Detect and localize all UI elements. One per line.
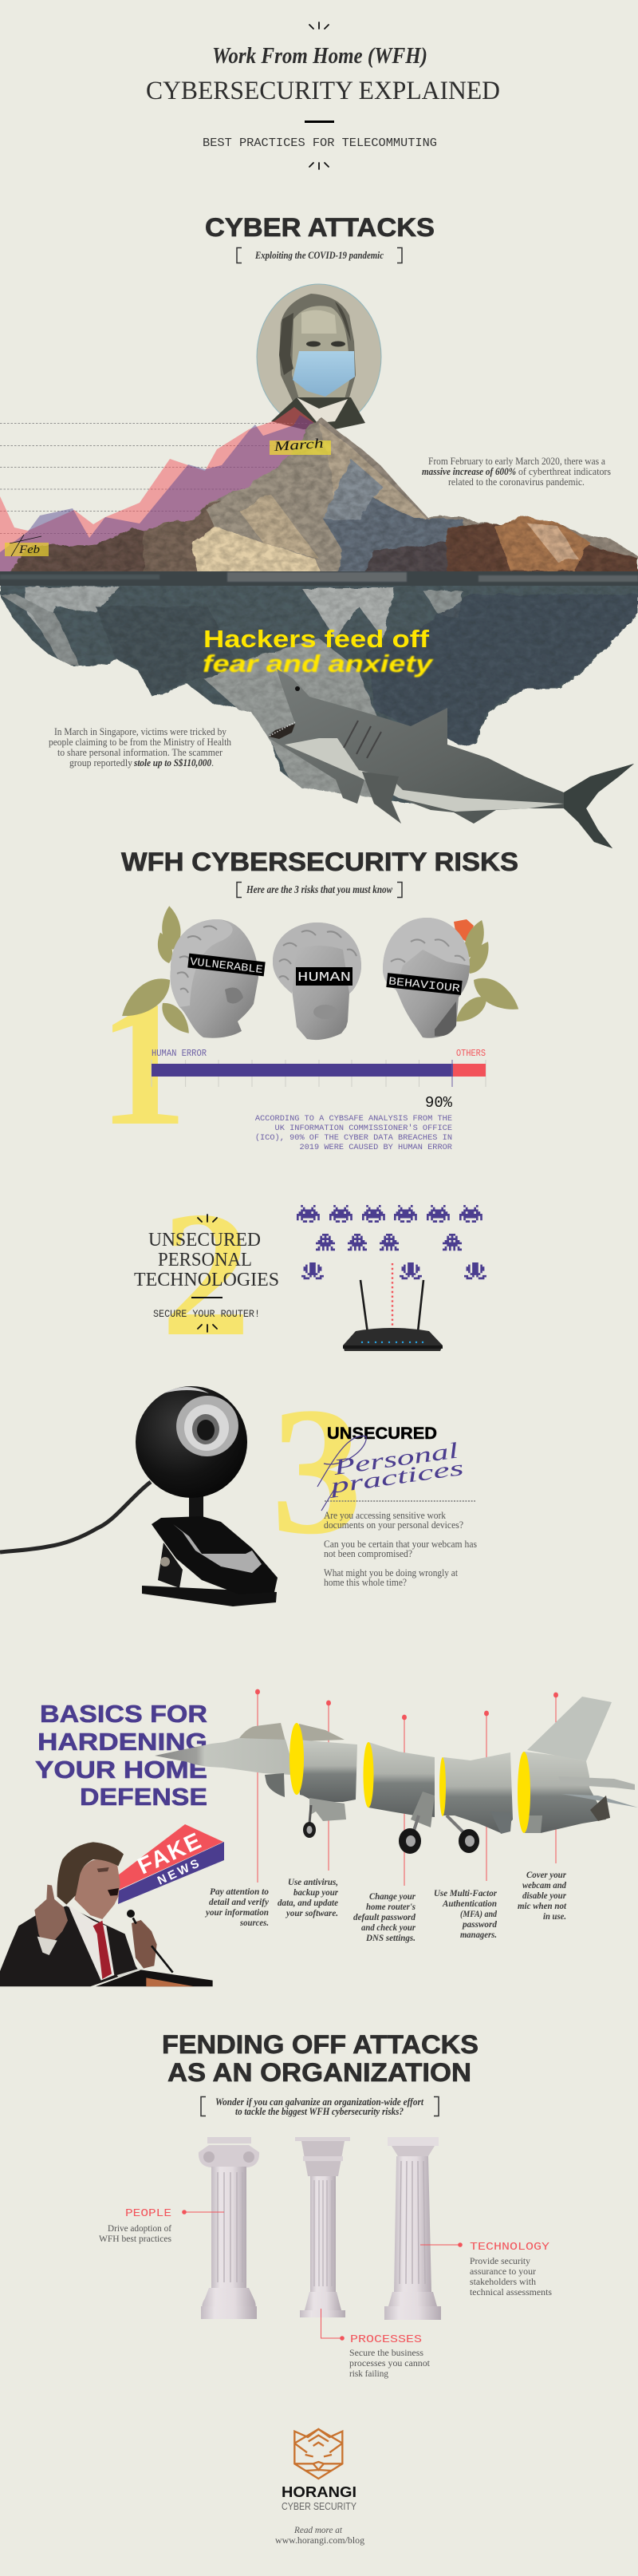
- callout lines: red pointers: [255, 1689, 558, 1886]
- heading: WFH cybersecurity risks: WFH CYBERSECURITY RISKS: [121, 847, 518, 876]
- subtitle: BEST PRACTICES FOR TELECOMMUTING: [203, 136, 437, 150]
- text: tip 2: your software.: [285, 1907, 338, 1918]
- illustration: mountain reflection under water: [0, 586, 638, 804]
- illustration: water surface: [0, 571, 638, 586]
- jet section 4: mid wing: [443, 1752, 513, 1853]
- text: tip 4: [434, 1887, 498, 1940]
- chart: threat indicators area chart: [0, 407, 317, 571]
- illustration: pillar processes: [295, 2137, 350, 2317]
- heading: personal practices script: Personal: [331, 1438, 460, 1480]
- footer: read more: www.horangi.com/blog: [275, 2535, 364, 2546]
- title line 2: CYBERSECURITY EXPLAINED: [146, 77, 500, 105]
- label: March marker: March: [273, 436, 324, 454]
- subheading: galvanize effort: Wonder if you can galvanize an organization-wide effort: [215, 2096, 423, 2108]
- text: questions: [324, 1510, 477, 1588]
- subtitle: SECURE YOUR ROUTER!: [153, 1308, 260, 1320]
- text: tip 1: sources.: [239, 1917, 269, 1928]
- label: March marker: [270, 436, 331, 455]
- text: tip 3: and check your: [361, 1922, 415, 1933]
- heading: basics for hardening your home defense: DEFENSE: [80, 1783, 207, 1811]
- illustration: three statue heads: [115, 905, 525, 1040]
- subheading: galvanize effort: [201, 2096, 439, 2117]
- icon: router: [343, 1280, 443, 1351]
- subheading: galvanize effort: to tackle the biggest WFH cybersecurity risks?: [235, 2106, 404, 2117]
- label: others: OTHERS: [456, 1048, 486, 1059]
- wordmark: HORANGI: [282, 2484, 356, 2500]
- block: unsecured personal technologies: [134, 1215, 279, 1332]
- bar: human error 90%: [152, 1064, 453, 1077]
- text: cybsafe analysis: 2019 WERE CAUSED BY HUMAN ERROR: [299, 1143, 452, 1152]
- text: tip 2: Use antivirus,: [288, 1876, 338, 1887]
- text: questions: Can you be certain that your webcam has: [324, 1539, 477, 1550]
- callout: processes: [321, 2309, 431, 2379]
- subheading: exploiting the pandemic: [237, 247, 402, 263]
- heading lines: UNSECURED: [148, 1230, 261, 1250]
- bar: others 10%: [453, 1064, 486, 1077]
- statue head 1: [170, 919, 266, 1038]
- heading: personal practices script: [317, 1436, 465, 1511]
- footer: read more: [275, 2524, 364, 2546]
- callout: processes: PROCESSES: [350, 2333, 422, 2346]
- text: tip 3: home router's: [366, 1901, 415, 1912]
- text: cybsafe analysis: UK INFORMATION COMMISSIONER'S OFFICE: [275, 1124, 452, 1133]
- header block: [146, 22, 500, 169]
- text: tip 2: data, and update: [278, 1897, 339, 1908]
- subheading: exploiting the pandemic: Exploiting the COVID-19 pandemic: [254, 250, 384, 261]
- text: tip 2: backup your: [293, 1887, 338, 1898]
- callout: hackers feed off fear and anxiety: fear and anxiety: [203, 650, 434, 678]
- statue head 2: [273, 923, 361, 1040]
- graphic: fake news banner: [118, 1824, 224, 1904]
- text: tip 1: [204, 1886, 270, 1928]
- text: Singapore scam note: stole up to S$110,000: [133, 757, 212, 768]
- callout: hackers feed off fear and anxiety: [203, 625, 434, 678]
- footer: read more: Read more at: [293, 2524, 343, 2535]
- illustration: mountain above water: [5, 417, 638, 571]
- portrait: masked banknote figure: [257, 284, 381, 429]
- jet section 1: nose: [155, 1723, 293, 1797]
- number 1: 1: [98, 965, 187, 1163]
- text: Singapore scam note: to share personal information. The scammer: [57, 747, 223, 758]
- text: tip 4: password: [462, 1918, 498, 1930]
- text: Singapore scam note: In March in Singapore, victims were tricked by: [54, 726, 227, 737]
- label: Feb marker: Feb: [18, 543, 41, 556]
- heading: personal practices script: practices: [326, 1456, 465, 1498]
- text: cybsafe analysis: [255, 1114, 452, 1152]
- text: tip 5: webcam and: [522, 1879, 567, 1891]
- heading: basics for hardening your home defense: [35, 1700, 207, 1811]
- graphic: fake news banner: FAKE: [134, 1827, 207, 1879]
- icon: face mask: [293, 351, 355, 397]
- callout: technology: Provide security: [470, 2255, 530, 2266]
- text: tip 5: in use.: [543, 1910, 566, 1922]
- label: vulnerable: VULNERABLE: [189, 956, 263, 977]
- number 2: 2: [161, 1174, 250, 1373]
- text: Singapore scam note: people claiming to be from the Ministry of Health: [49, 737, 232, 748]
- text: tip 5: disable your: [522, 1890, 566, 1901]
- text: Singapore scam note: .: [211, 757, 214, 768]
- text: questions: What might you be doing wrongly at: [324, 1567, 458, 1578]
- heading: basics for hardening your home defense: HARDENING: [37, 1728, 207, 1756]
- illustration: pillar technology: [384, 2137, 441, 2320]
- heading: fending off attacks: AS AN ORGANIZATION: [167, 2058, 471, 2087]
- icon: top sparks: [309, 22, 329, 29]
- icon: sparks bottom: [198, 1325, 217, 1332]
- text: cybsafe analysis: (ICO), 90% OF THE CYBER DATA BREACHES IN: [255, 1133, 452, 1143]
- text: tip 3: default password: [353, 1911, 416, 1922]
- label: human: HUMAN: [297, 970, 351, 986]
- text: 600% increase note: of cyberthreat indicators: [518, 466, 611, 477]
- text: tip 3: [353, 1891, 416, 1943]
- heading: fending off attacks: FENDING OFF ATTACKS: [162, 2030, 478, 2059]
- callout: technology: stakeholders with: [470, 2276, 536, 2287]
- jet section 3: fuselage: [368, 1742, 435, 1854]
- callout: people: WFH best practices: [99, 2233, 171, 2244]
- heading lines: PERSONAL: [158, 1250, 252, 1270]
- block: unsecured personal practices: [317, 1424, 477, 1588]
- divider: [191, 1297, 223, 1298]
- icon: sparks top: [198, 1215, 217, 1222]
- divider: [325, 1500, 475, 1502]
- text: tip 4: (MFA) and: [460, 1908, 498, 1919]
- heading: fending off attacks: [162, 2030, 478, 2087]
- text: tip 4: Authentication: [442, 1898, 497, 1909]
- callout: people: PEOPLE: [125, 2207, 171, 2220]
- text: questions: Are you accessing sensitive work: [324, 1510, 447, 1521]
- heading lines: TECHNOLOGIES: [134, 1270, 279, 1290]
- text: 600% increase note: massive increase of 600%: [422, 466, 516, 477]
- callout: people: [99, 2207, 224, 2244]
- text: tip 4: Use Multi-Factor: [434, 1887, 497, 1898]
- subheading: 3 risks: [237, 883, 402, 897]
- value: 90%: 90%: [425, 1094, 453, 1112]
- heading lines: [134, 1230, 279, 1290]
- text: 600% increase note: From February to early March 2020, there was a: [428, 456, 605, 467]
- text: questions: not been compromised?: [324, 1548, 412, 1559]
- label: behaviour: BEHAVIOUR: [388, 975, 461, 996]
- icon: right leaves and flower: [451, 917, 525, 1028]
- callout: processes: risk failing: [349, 2368, 388, 2379]
- callout: hackers feed off fear and anxiety: Hackers feed off: [203, 625, 430, 653]
- label: Feb marker: [5, 535, 49, 556]
- illustration: speaker at podium: [0, 1842, 213, 1986]
- title divider: [305, 121, 334, 123]
- logo: Horangi tiger: [282, 2429, 356, 2512]
- jet section 5: tail: [525, 1697, 638, 1833]
- label: human: [296, 967, 352, 986]
- illustration: pillar people: [199, 2137, 259, 2319]
- graphic: fake news banner: NEWS: [156, 1855, 204, 1888]
- heading: basics for hardening your home defense: YOUR HOME: [35, 1756, 207, 1784]
- subheading: 3 risks: Here are the 3 risks that you must know: [246, 883, 393, 895]
- text: tip 2: [278, 1876, 339, 1918]
- text: tip 1: Pay attention to: [210, 1886, 269, 1897]
- label: behaviour: [386, 973, 463, 996]
- text: questions: home this whole time?: [324, 1577, 407, 1588]
- icon: webcam: [0, 1386, 278, 1606]
- callout: technology: technical assessments: [470, 2286, 552, 2297]
- text: tip 3: DNS settings.: [365, 1932, 415, 1943]
- text: questions: documents on your personal devices?: [324, 1519, 463, 1531]
- icon: space invaders attacking: [297, 1205, 486, 1279]
- arrow: dotted attack beam: [392, 1263, 393, 1326]
- callout: processes: Secure the business: [349, 2347, 423, 2358]
- text: tip 5: [518, 1869, 567, 1922]
- text: tip 3: Change your: [369, 1891, 415, 1902]
- number 3: 3: [271, 1369, 362, 1572]
- title line 1: Work From Home (WFH): [212, 43, 427, 69]
- text: Singapore scam note: [49, 726, 232, 768]
- statue head 3: [383, 918, 470, 1038]
- callout: processes: processes you cannot: [349, 2357, 431, 2369]
- icon: bottom sparks: [309, 163, 329, 169]
- label: human error: HUMAN ERROR: [152, 1048, 207, 1059]
- illustration: sliced fighter jet: [155, 1697, 638, 1854]
- text: 600% increase note: [422, 456, 611, 488]
- callout: people: Drive adoption of: [108, 2222, 171, 2234]
- text: 600% increase note: related to the coronavirus pandemic.: [448, 476, 585, 488]
- icon: left leaves: [115, 905, 195, 1039]
- callout: technology: assurance to your: [470, 2266, 536, 2277]
- text: tip 1: detail and verify: [209, 1896, 270, 1907]
- text: tip 1: your information: [204, 1906, 269, 1918]
- tagline: CYBER SECURITY: [282, 2500, 356, 2512]
- heading: basics for hardening your home defense: BASICS FOR: [40, 1700, 207, 1728]
- text: tip 5: mic when not: [518, 1900, 567, 1911]
- heading: cyber attacks: CYBER ATTACKS: [205, 213, 435, 242]
- illustration: shark: [269, 669, 634, 848]
- text: tip 4: managers.: [460, 1929, 497, 1940]
- callout: technology: TECHNOLOGY: [470, 2241, 550, 2254]
- text: cybsafe analysis: ACCORDING TO A CYBSAFE ANALYSIS FROM THE: [255, 1114, 452, 1124]
- chart: human error share bar: [152, 1048, 486, 1152]
- callout: technology: [420, 2241, 552, 2297]
- text: Singapore scam note: group reportedly: [69, 757, 133, 768]
- heading: unsecured: UNSECURED: [327, 1424, 437, 1443]
- jet section 2: cockpit: [297, 1724, 357, 1838]
- jet slices: yellow cut faces: [289, 1723, 530, 1833]
- text: tip 5: Cover your: [526, 1869, 566, 1880]
